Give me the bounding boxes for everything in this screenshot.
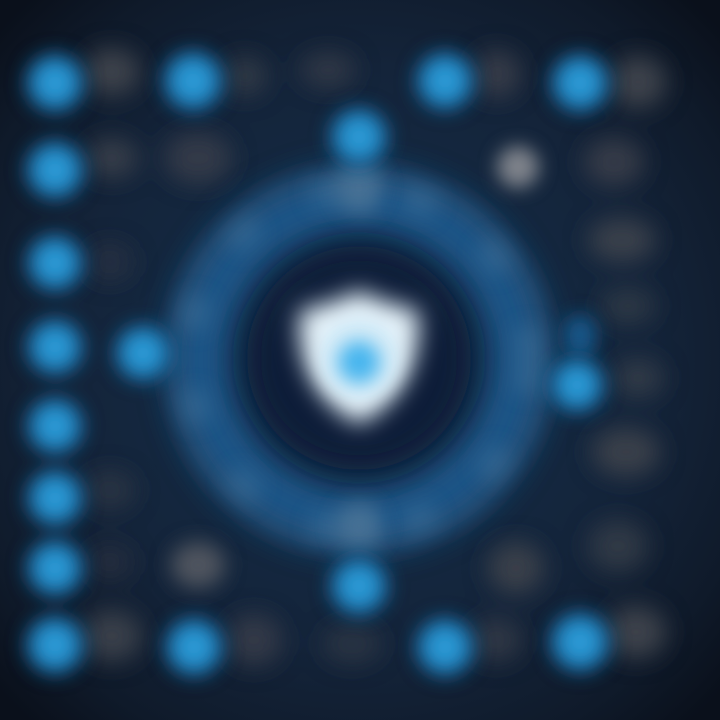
lighter gray blobs [171, 146, 539, 588]
ring [175, 162, 597, 550]
dark inner circle [247, 246, 471, 470]
gray blobs [82, 48, 666, 666]
blue dots [23, 48, 613, 679]
shield icon [299, 290, 419, 424]
